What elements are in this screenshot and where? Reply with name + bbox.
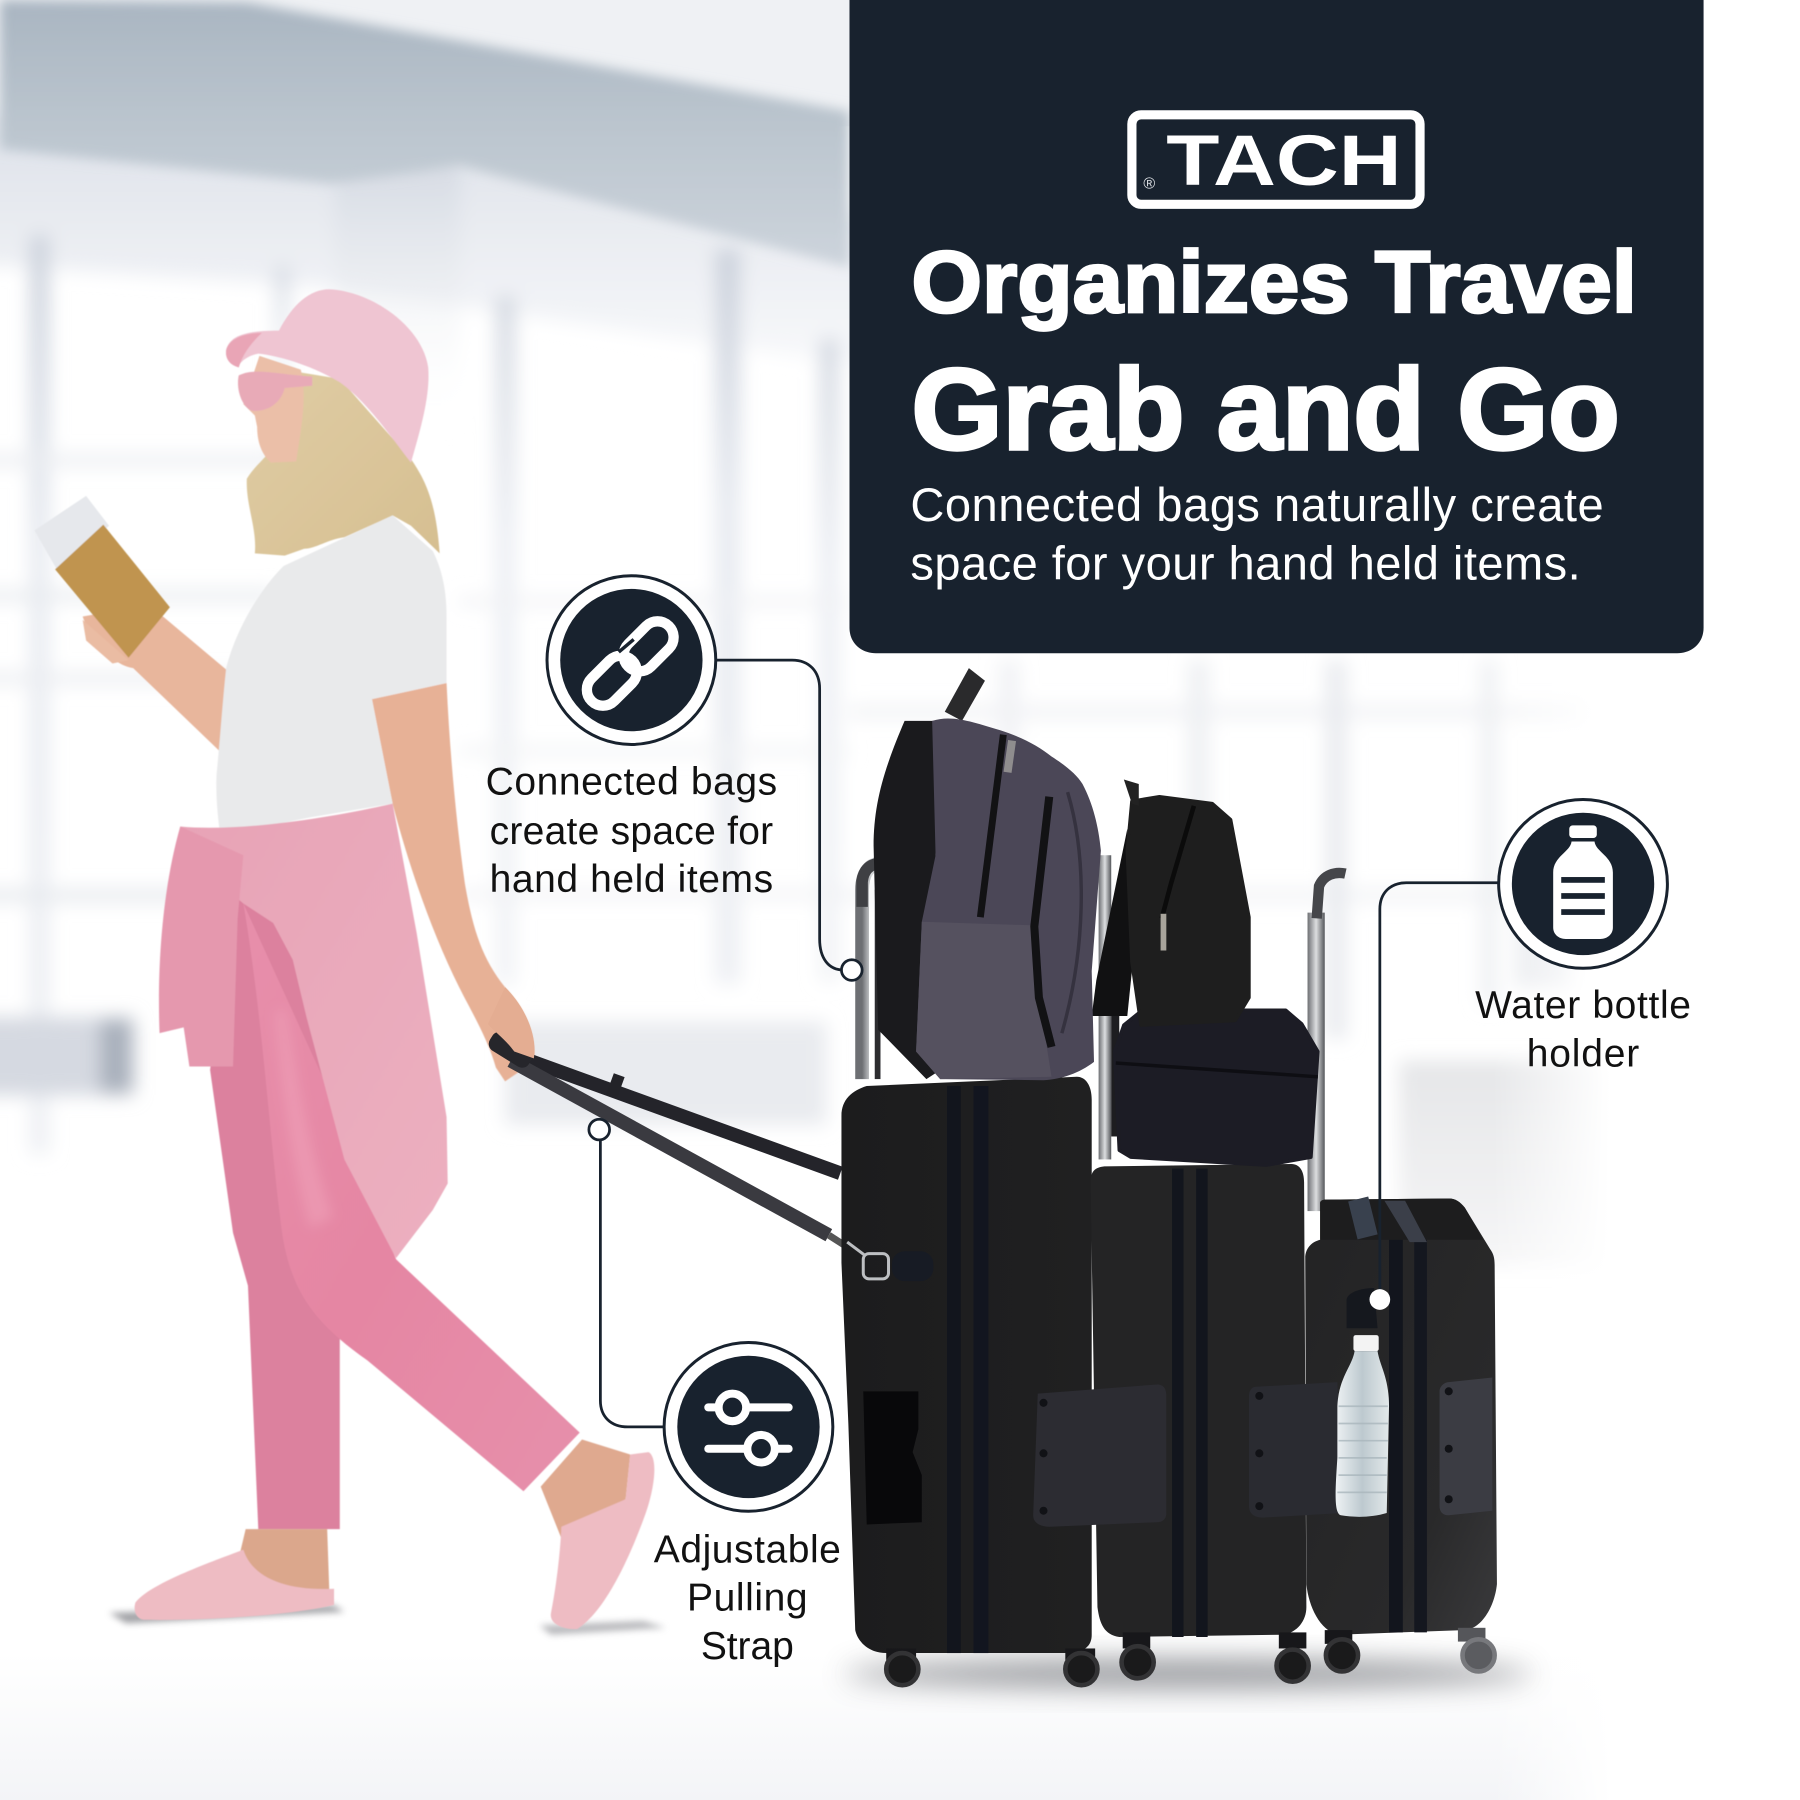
hair <box>247 367 440 556</box>
anchor dot <box>841 960 862 980</box>
rear arm <box>372 683 535 1081</box>
rear shoe <box>135 1550 334 1620</box>
subheading: space for your hand held items. <box>910 537 1581 590</box>
icon: chain link <box>547 576 716 744</box>
panel: headline <box>849 0 1704 653</box>
icon: bottle <box>1499 800 1667 968</box>
small suitcase <box>1305 1197 1497 1635</box>
label: Strap <box>701 1625 794 1668</box>
callout: water bottle holder <box>1370 800 1691 1310</box>
pants highlight <box>276 1010 333 1228</box>
label: Water bottle <box>1475 984 1691 1027</box>
boarding pass <box>34 496 109 571</box>
sweater tied at waist <box>180 804 448 1258</box>
label: Pulling <box>687 1577 808 1620</box>
medium suitcase <box>1091 1164 1306 1637</box>
large suitcase <box>841 1077 1092 1653</box>
heading: Grab and Go: Grab and Go <box>911 346 1620 474</box>
floor shadows <box>109 1605 1533 1689</box>
connector panels <box>1033 1378 1492 1527</box>
hat brim inside <box>226 333 262 367</box>
logo: TACH: ® <box>1143 174 1155 192</box>
sunglasses <box>238 372 312 411</box>
front leg <box>243 903 580 1491</box>
logo: TACH <box>1132 115 1420 204</box>
heading: Organizes Travel: Organizes Travel <box>911 234 1637 331</box>
t-shirt <box>216 515 447 836</box>
anchor dot <box>589 1119 610 1140</box>
label: holder <box>1527 1032 1639 1075</box>
water bottle <box>1336 1335 1389 1517</box>
fingers <box>83 620 129 664</box>
anchor dot <box>1370 1289 1390 1310</box>
carabiner <box>847 1242 889 1279</box>
water bottle hook <box>1347 1288 1378 1328</box>
label: create space for <box>490 810 773 853</box>
logo: TACH: TACH <box>1166 122 1402 201</box>
small black backpack <box>1092 779 1249 1025</box>
woman with passport <box>34 289 654 1629</box>
large grey backpack <box>874 668 1101 1080</box>
bucket hat <box>226 289 429 463</box>
gripping fingers <box>488 987 535 1058</box>
front shoe <box>551 1452 654 1629</box>
toiletry bag <box>1115 1010 1318 1165</box>
passport holder <box>55 525 170 658</box>
rear ankle <box>235 1529 329 1596</box>
pulling strap <box>486 1029 845 1246</box>
callout: adjustable strap <box>589 1119 841 1668</box>
label: Adjustable <box>654 1528 841 1571</box>
front pocket <box>916 922 1052 1079</box>
side plate <box>863 1391 922 1524</box>
rear leg <box>210 884 396 1529</box>
subheading: Connected bags naturally create <box>910 478 1604 531</box>
strap anchor patch <box>892 1251 933 1281</box>
label: Connected bags <box>486 760 777 803</box>
front arm and hand <box>83 608 235 752</box>
face <box>243 356 304 463</box>
label: hand held items <box>490 858 773 901</box>
sweater sleeves and cuffs <box>159 827 243 1066</box>
callout: connected bags <box>486 576 862 980</box>
icon: sliders <box>664 1343 833 1511</box>
trolley handles <box>862 855 1345 1211</box>
wheels <box>886 1628 1495 1685</box>
front foot <box>541 1440 630 1538</box>
